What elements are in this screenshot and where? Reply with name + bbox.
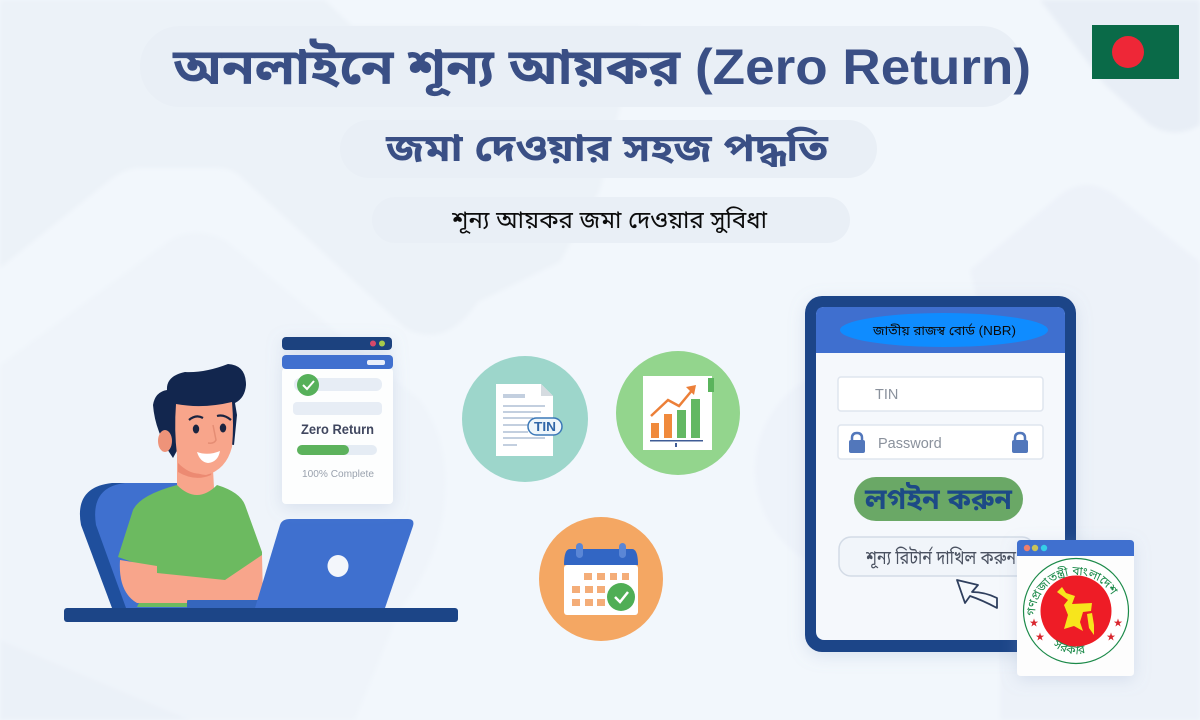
seal stars: ★ <box>1035 632 1045 642</box>
laptop keyboard <box>187 600 277 609</box>
zero return card <box>282 337 393 504</box>
hair <box>153 364 246 458</box>
seal stars: ★ <box>1113 618 1123 628</box>
desk <box>64 608 458 622</box>
icon: calendar <box>539 517 663 641</box>
map of Bangladesh <box>1057 587 1092 631</box>
illustration: person at laptop <box>64 364 458 622</box>
seal stars: ★ <box>1029 618 1039 628</box>
seal stars: ★ <box>1106 632 1116 642</box>
arm <box>120 555 263 603</box>
eyes <box>193 424 226 434</box>
shirt <box>118 485 262 607</box>
ear <box>158 430 172 452</box>
chair <box>80 483 200 608</box>
icon: cursor arrow <box>957 580 997 608</box>
icon: Bangladesh flag <box>1092 25 1179 79</box>
submit zero return button: শূন্য রিটার্ন দাখিল করুন <box>865 546 1016 569</box>
laptop <box>255 519 413 608</box>
icon: TIN document <box>462 356 588 482</box>
card progress text: 100% Complete <box>302 468 374 480</box>
neck <box>177 450 214 496</box>
card label: Zero Return <box>301 422 374 437</box>
chin shadow <box>178 463 212 478</box>
tablet login panel <box>805 296 1076 652</box>
subtitle: জমা দেওয়ার সহজ পদ্ধতি <box>385 126 829 170</box>
submit zero return button <box>839 537 1034 576</box>
seal bottom text: সরকার <box>1054 640 1084 654</box>
icon: TIN document: TIN <box>534 419 556 434</box>
brows <box>189 416 231 420</box>
title pill backgrounds <box>140 26 1022 243</box>
mouth <box>197 451 220 463</box>
government seal <box>1022 558 1130 664</box>
seal window card <box>1013 540 1137 683</box>
title: অনলাইনে শূন্য আয়কর (Zero Return) <box>172 38 1031 97</box>
NBR badge <box>840 313 1048 347</box>
TIN field: TIN <box>875 387 898 403</box>
NBR badge: জাতীয় রাজস্ব বোর্ড (NBR) <box>872 323 1016 338</box>
password field: Password <box>878 436 942 452</box>
section heading: শূন্য আয়কর জমা দেওয়ার সুবিধা <box>451 206 768 234</box>
face <box>175 402 233 475</box>
TIN field <box>838 377 1043 411</box>
laptop logo <box>328 555 348 577</box>
seal stars <box>1029 618 1123 642</box>
password field <box>838 425 1043 459</box>
icon: growth chart <box>616 351 740 475</box>
login button: লগইন করুন <box>864 483 1013 516</box>
seal top text: গণপ্রজাতন্ত্রী বাংলাদেশ <box>1027 566 1118 616</box>
login button <box>854 477 1023 521</box>
nose <box>208 425 216 443</box>
